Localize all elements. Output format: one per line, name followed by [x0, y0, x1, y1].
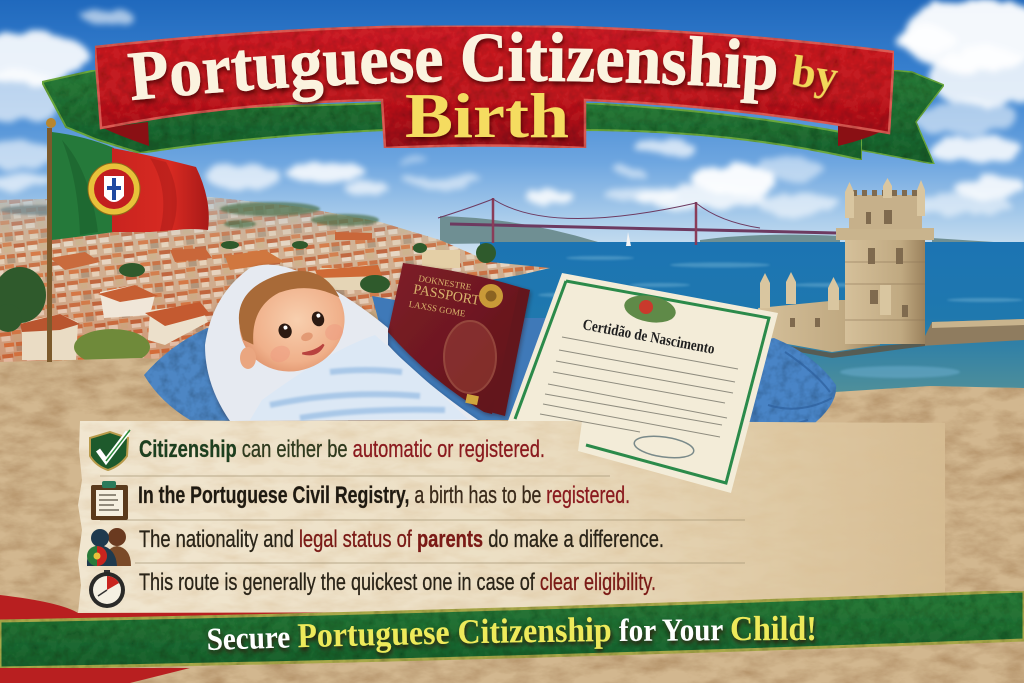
icon: stopwatch: [89, 570, 125, 608]
green back ribbon right: [582, 103, 862, 160]
icon: parents silhouettes: [87, 528, 131, 566]
line 4: This route is generally the quickest one in case of clear eligibility.: [139, 569, 656, 596]
bottom red ribbon: [0, 595, 500, 683]
right towel: [735, 338, 836, 444]
blue pillow towel: [144, 296, 836, 444]
green certificate border: [515, 281, 769, 483]
green field: [52, 132, 114, 240]
line 3: The nationality and legal status of parents do make a difference.: [139, 526, 664, 553]
passport text: [408, 272, 483, 321]
title ribbon: [42, 26, 944, 204]
title word: Birth: Birth: [405, 80, 569, 151]
clouds: [0, 0, 1024, 217]
line 2: In the Portuguese Civil Registry, a birth has to be registered.: [138, 482, 630, 509]
stamp: [633, 433, 695, 461]
icon: clipboard: [91, 481, 128, 520]
gold emblem: [479, 284, 503, 308]
banner slogan: Secure Portuguese Citizenship for Your Child!: [207, 616, 817, 658]
trees: [0, 241, 496, 365]
passport text: DOKNESTRE: [418, 273, 473, 292]
passport: [388, 263, 530, 416]
hood and blanket: [205, 265, 478, 421]
line 1: Citizenship can either be automatic or registered.: [139, 436, 545, 463]
wooded hillside: [0, 202, 379, 228]
title text: Portuguese Citizenship: [126, 32, 780, 110]
green tail right: [850, 70, 944, 164]
red field: [112, 148, 209, 232]
red ribbon folds: [103, 122, 884, 146]
face: [225, 258, 359, 386]
sandy ground: [0, 358, 1024, 683]
certificate title: Certidão de Nascimento: [581, 316, 716, 358]
sky background: [0, 0, 1024, 262]
form lines: [540, 337, 738, 437]
baby wrapped in towel: [205, 258, 478, 421]
bottom green banner: [0, 591, 1024, 668]
birth certificate: [508, 273, 778, 493]
sailboat: [626, 232, 631, 246]
passport text: LAXSS GOME: [408, 299, 467, 319]
flag pole: [47, 128, 52, 362]
tower body: [845, 238, 925, 344]
nose and mouth: [300, 331, 314, 343]
foreground houses: [20, 232, 460, 360]
Portuguese flag: [46, 118, 209, 362]
passport text: PASSPORT: [412, 282, 481, 309]
distant hills: [440, 216, 1024, 248]
sea highlights: [538, 256, 1023, 378]
icon: shield check: [90, 430, 130, 470]
atmospheric haze over city: [0, 197, 550, 365]
ear: [240, 347, 256, 369]
suspension bridge: [438, 198, 836, 245]
red main ribbon: [95, 26, 894, 148]
green back ribbon left: [42, 70, 385, 153]
title word: by: by: [789, 46, 841, 101]
sea: [480, 242, 1024, 392]
bastion: [758, 300, 880, 352]
crest: [622, 292, 678, 326]
coat of arms: [88, 163, 140, 215]
eyes: [276, 322, 294, 340]
Belem tower: [758, 178, 1024, 358]
city of Lisbon: [0, 197, 550, 365]
turrets: [760, 178, 925, 315]
parchment info panel: [78, 421, 945, 613]
